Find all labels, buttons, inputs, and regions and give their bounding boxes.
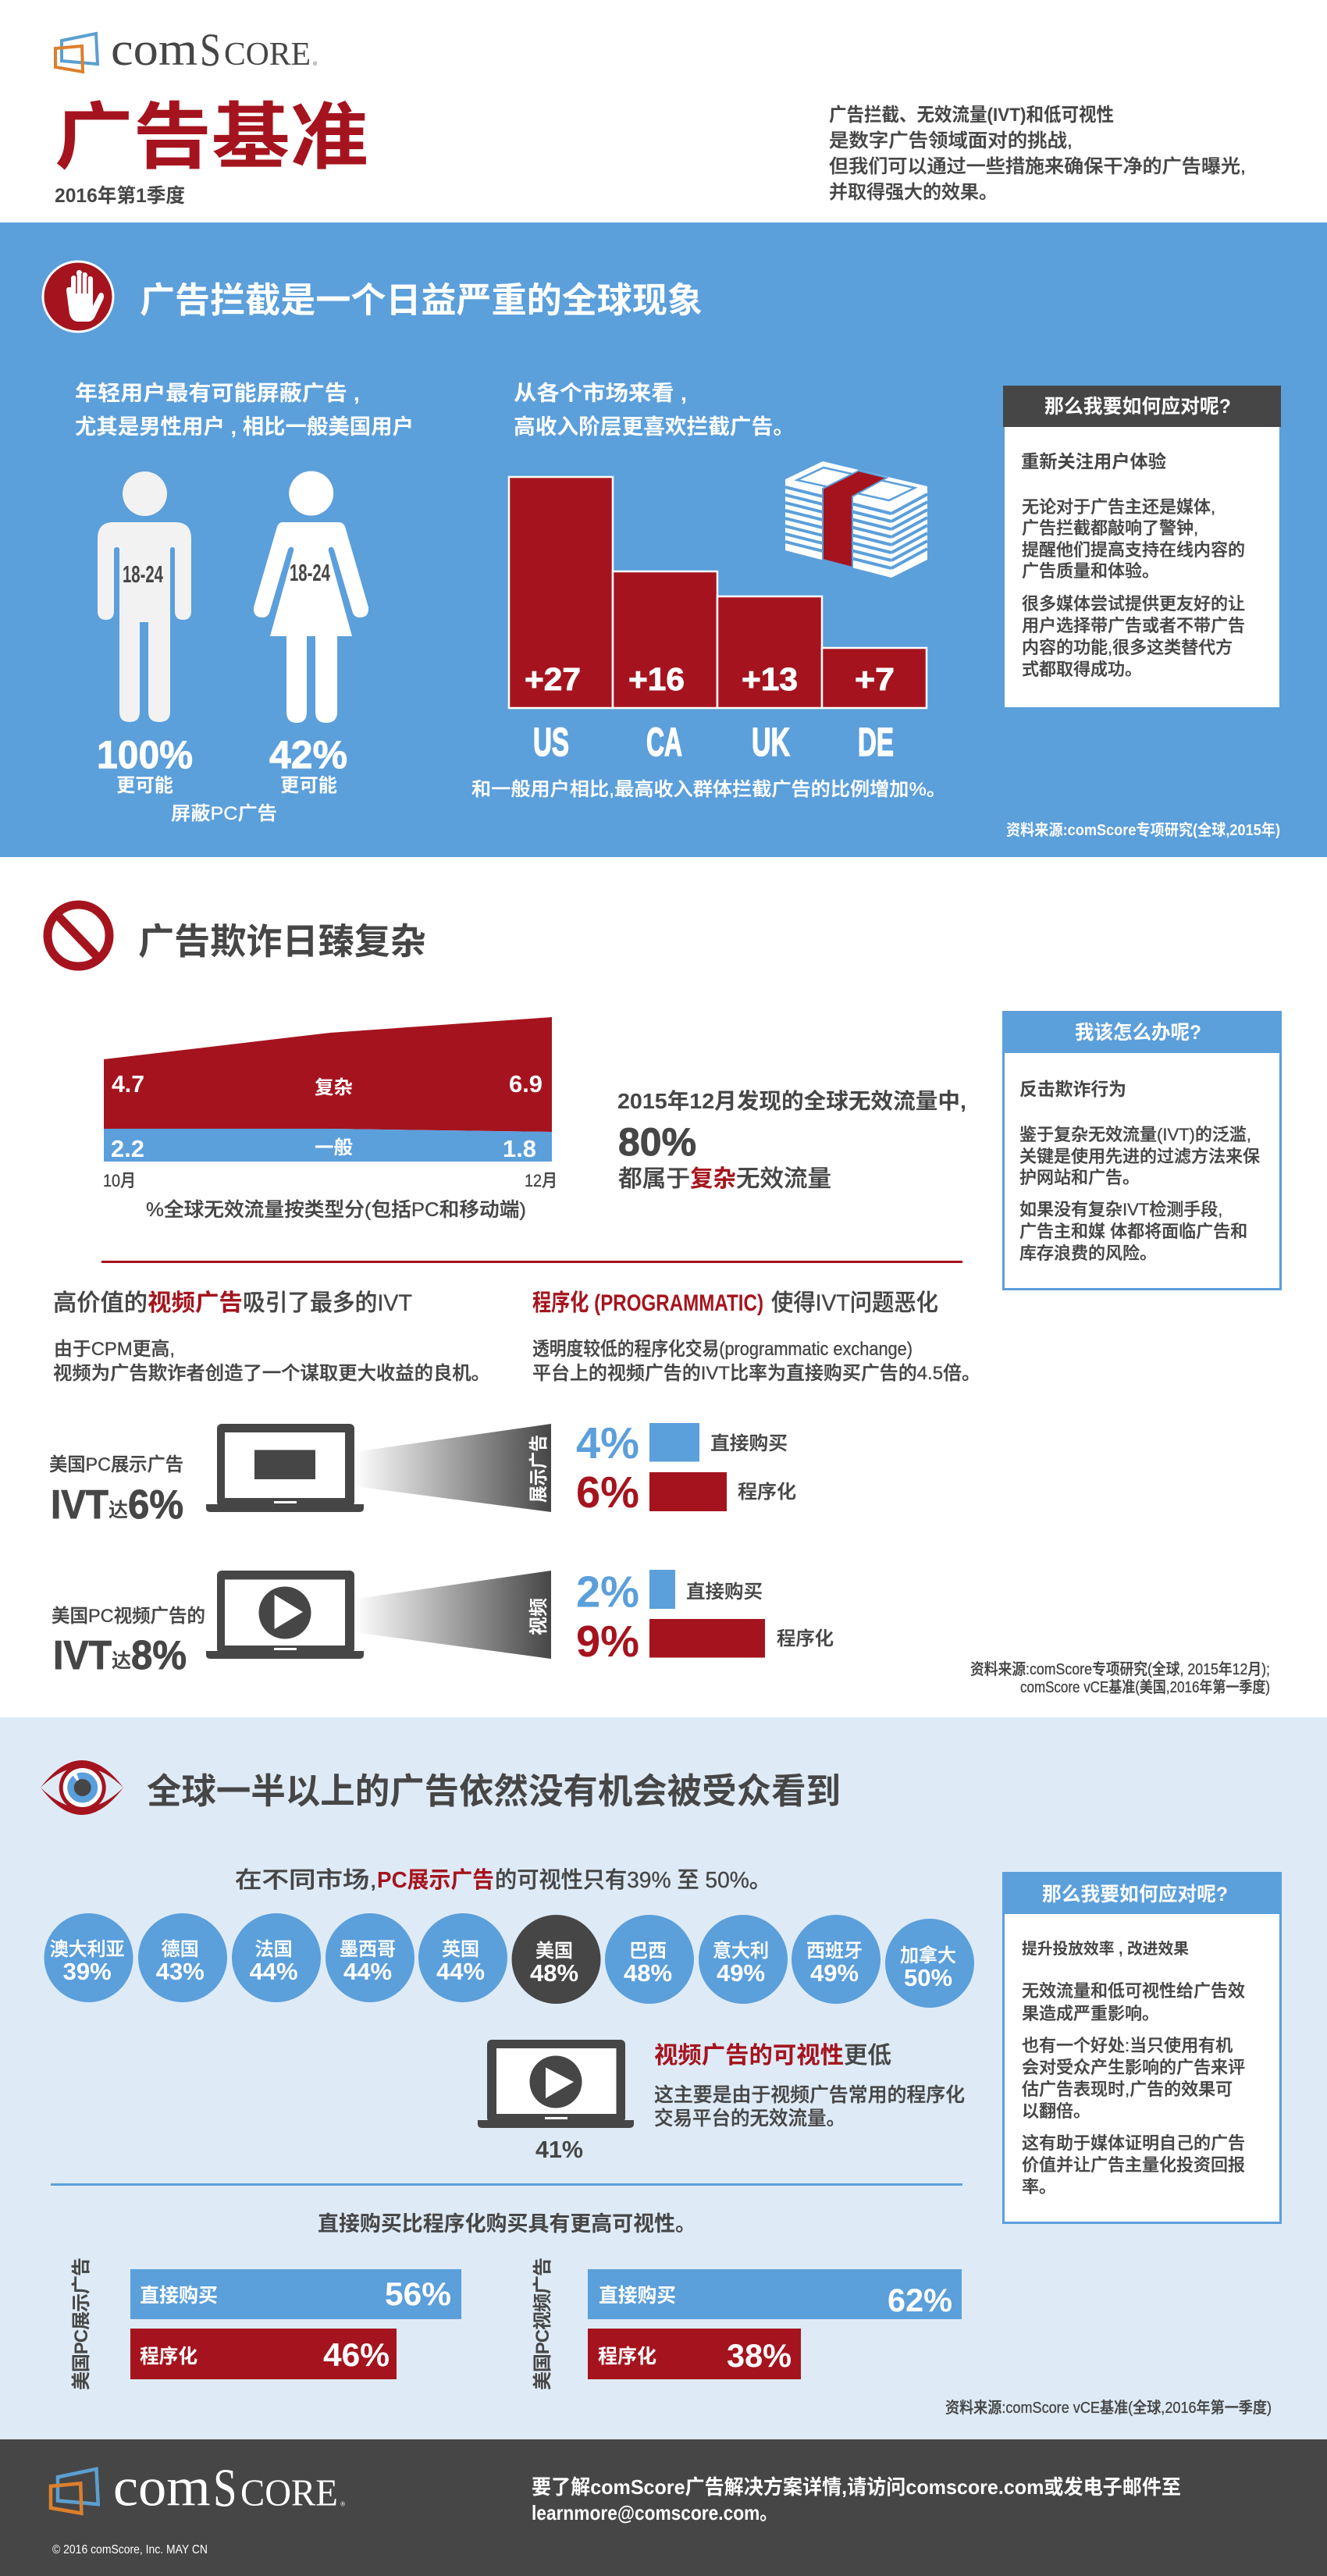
area chart: 10月 [103,1171,136,1190]
callout: 80%: 2015年12月发现的全球无效流量中, [617,1089,966,1113]
contact text: 要了解comScore广告解决方案详情,请访问comscore.com或发电子邮件至 [532,2475,1181,2499]
sidebar: what to do: 果造成严重影响。 [1022,2004,1159,2023]
callout: 80%: 80% [618,1120,696,1164]
subheading: markets: 从各个市场来看 , [514,382,687,405]
area chart [103,1017,557,1221]
bar chart: display: 美国PC展示广告 [71,2258,92,2390]
area chart: 1.8 [503,1135,536,1162]
panel: ad fraud [48,905,1282,1696]
intro text: 并取得强大的效果。 [829,182,998,203]
label: display IVT 6%: 达 [109,1500,128,1521]
chart: country circles: 法国 [255,1939,293,1960]
chart: country circles: 加拿大 [900,1944,956,1966]
area chart: %全球无效流量按类型分(包括PC和移动端) [146,1199,526,1221]
icon: woman: 18-24 [290,559,330,586]
sidebar: what to do: 那么我要如何应对呢? [1042,1883,1228,1905]
bar chart: video: 直接购买 [599,2285,676,2307]
text block: video ads: 由于CPM更高, [54,1339,175,1360]
source note: 资料来源:comScore专项研究(全球,2015年) [1006,820,1280,839]
bar chart: income by market: US [533,720,569,764]
chart: video bars: 直接购买 [686,1582,763,1603]
sidebar: what to do [1003,386,1281,707]
sidebar: what should I do [1002,1011,1282,1290]
source note: comScore vCE基准(美国,2016年第一季度) [1020,1678,1270,1696]
heading: 广告欺诈日臻复杂 [138,921,426,962]
chart: country circles: 意大利 [713,1941,769,1962]
source note: 资料来源:comScore vCE基准(全球,2016年第一季度) [945,2399,1272,2417]
text block: programmatic: 使得IVT问题恶化 [771,1290,938,1316]
chart: country circles: 49% [810,1959,859,1987]
label: display IVT 6%: IVT [51,1482,109,1528]
label: display IVT 6%: 美国PC展示广告 [49,1454,183,1475]
contact text [532,2475,1181,2524]
bar chart: income by market [509,477,927,764]
bar chart: income by market: +13 [742,661,798,697]
chart: country circles: 美国 [535,1941,573,1962]
chart: video bars: 2% [576,1567,639,1617]
sidebar: what should I do: 我该怎么办呢? [1075,1022,1201,1044]
sidebar: what should I do: 如果没有复杂IVT检测手段, [1019,1200,1222,1219]
sidebar: what to do: 很多媒体尝试提供更友好的让 [1022,594,1245,614]
icon: laptop with play [478,2040,634,2128]
chart: country circles: 39% [63,1958,112,1985]
logo: comScore: ® [313,61,318,67]
chart: country circles: 48% [624,1959,672,1987]
logo: comScore white: S [213,2458,237,2518]
sidebar: what to do: 估广告表现时,广告的效果可 [1022,2080,1233,2099]
logo: comScore white: com [113,2457,211,2517]
chart: video bars: 程序化 [777,1628,834,1649]
label: video IVT 8% [52,1606,205,1678]
icon: man [98,471,191,722]
arrow: display cone: 展示广告 [528,1435,550,1503]
subheading: markets: 高收入阶层更喜欢拦截广告。 [514,415,795,439]
heading: 广告拦截是一个日益严重的全球现象 [140,280,703,320]
subheading: 的可视性只有39% 至 50%。 [495,1867,771,1893]
text block: video viewability: 更低 [844,2043,891,2069]
stat: 100%: 100% [97,733,193,777]
icon: money stack [785,461,927,578]
sidebar: what should I do: 广告主和媒 体都将面临广告和 [1019,1222,1247,1241]
icon: man: 18-24 [123,560,163,588]
chart: country circles: 44% [250,1958,298,1985]
caption: income comparison: 和一般用户相比,最高收入群体拦截广告的比例增加%。 [471,779,946,800]
bar chart: income by market: CA [646,720,682,764]
callout: 80%: 无效流量 [736,1166,831,1192]
chart: country circles: 德国 [162,1939,199,1960]
sidebar: what to do: 重新关注用户体验 [1021,451,1166,471]
stat: 42%: 更可能 [280,775,337,796]
text block: programmatic: 程序化 (PROGRAMMATIC) [532,1290,763,1316]
sidebar: what to do: 率。 [1022,2177,1056,2197]
text block: video viewability: 视频广告的可视性 [654,2043,844,2069]
chart: country circles: 43% [156,1958,205,1985]
heading: direct vs programmatic: 直接购买比程序化购买具有更高可视性。 [318,2212,696,2236]
bar chart: video [532,2258,962,2390]
intro text: 广告拦截、无效流量(IVT)和低可视性 [829,105,1114,126]
source note: 资料来源:comScore专项研究(全球, 2015年12月); [970,1660,1270,1678]
stat: 41%: 41% [535,2136,583,2163]
label: video IVT 8%: 8% [131,1633,187,1678]
caption: block PC ads: 屏蔽PC广告 [171,803,277,824]
text block: programmatic: 平台上的视频广告的IVT比率为直接购买广告的4.5倍。 [532,1363,980,1384]
panel: viewability [0,1717,1327,2439]
sidebar: what to do: 提升投放效率 , 改进效果 [1022,1940,1189,1958]
sidebar: what to do: 用户选择带广告或者不带广告 [1022,616,1245,635]
logo: comScore: CORE [224,37,311,73]
header [55,23,1246,207]
chart: country circles: 巴西 [629,1941,667,1962]
sidebar: what to do: 以翻倍。 [1022,2101,1090,2121]
chart: country circles: 英国 [442,1939,479,1960]
sidebar: what to do: 广告质量和体验。 [1022,561,1159,581]
intro text [829,105,1246,203]
chart: country circles: 48% [530,1959,578,1987]
text block: video ads: 视频为广告欺诈者创造了一个谋取更大收益的良机。 [53,1363,490,1384]
subheading: young users: 年轻用户最有可能屏蔽广告 , [75,382,360,405]
bar chart: video: 62% [888,2282,952,2318]
chart: country circles: 44% [343,1958,392,1985]
icon: woman [254,471,368,723]
bar chart: income by market: +27 [525,661,581,697]
heading: 全球一半以上的广告依然没有机会被受众看到 [147,1771,841,1811]
logo: comScore white: ® [340,2500,345,2507]
bar chart: income by market: UK [752,720,790,764]
contact text: learnmore@comscore.com。 [532,2501,777,2524]
chart: country circles: 44% [436,1958,485,1985]
chart: video bars: 9% [576,1617,639,1667]
text block: video ads: 视频广告 [148,1290,243,1316]
chart: country circles: 50% [904,1964,952,1991]
label: video IVT 8%: 达 [112,1650,131,1672]
text block: video ads: 吸引了最多的IVT [243,1290,412,1316]
icon: prohibited [48,905,109,966]
arrow: video cone: 视频 [528,1598,550,1635]
bar chart: display: 56% [385,2275,451,2312]
intro text: 是数字广告领域面对的挑战, [829,130,1073,151]
copyright: © 2016 comScore, Inc. MAY CN [52,2543,208,2556]
chart: display bars: 直接购买 [710,1433,788,1454]
source note [970,1660,1270,1696]
label: video IVT 8%: 美国PC视频广告的 [52,1606,205,1627]
area chart: 6.9 [509,1070,543,1098]
date: 2016年第1季度 [55,185,185,207]
label: display IVT 6%: 6% [128,1482,183,1528]
area chart: 4.7 [112,1070,144,1098]
subheading: markets [514,382,795,439]
bar chart: income by market: DE [858,720,894,764]
bar chart: income by market: +16 [628,661,685,697]
bar chart: income by market: +7 [855,661,895,697]
chart: display bars: 4% [576,1418,639,1468]
panel: ad blocking [0,222,1327,857]
logo: comScore: com [111,23,197,75]
text block: video viewability: 这主要是由于视频广告常用的程序化 [654,2084,965,2106]
sidebar: what to do: 式都取得成功。 [1022,660,1142,679]
sidebar: what to do: 无论对于广告主还是媒体, [1022,497,1215,517]
arrow: display cone [354,1424,551,1512]
chart: video bars [576,1567,834,1667]
sidebar: what should I do: 关键是使用先进的过滤方法来保 [1019,1147,1260,1166]
sidebar: what to do: 广告拦截都敲响了警钟, [1022,518,1198,538]
chart: country circles: 西班牙 [806,1941,863,1962]
bar chart: video: 程序化 [598,2346,656,2368]
bar chart: display: 直接购买 [140,2285,218,2307]
title: 广告基准 [55,97,368,178]
sidebar: what to do: 内容的功能,很多这类替代方 [1022,638,1233,657]
subheading: young users [75,382,414,439]
bar chart: display: 46% [323,2336,390,2373]
text block: video viewability [654,2043,965,2129]
label: video IVT 8%: IVT [53,1633,112,1678]
sidebar: what to do: 价值并让广告主量化投资回报 [1022,2155,1245,2175]
stat: 100% [97,733,193,796]
chart: country circles: 49% [717,1959,765,1987]
area chart: 一般 [315,1137,353,1158]
text block: video ads [53,1290,490,1384]
icon: laptop with banner [206,1424,364,1512]
logo: comScore white: CORE [240,2472,338,2514]
sidebar: what to do: 会对受众产生影响的广告来评 [1022,2058,1245,2077]
sidebar: what should I do: 护网站和广告。 [1019,1168,1140,1187]
sidebar: what should I do: 鉴于复杂无效流量(IVT)的泛滥, [1019,1125,1251,1144]
subheading: 在不同市场, [235,1867,377,1893]
stat: 42% [269,733,347,796]
icon: eye [41,1760,123,1815]
sidebar: what to do: 那么我要如何应对呢? [1044,395,1231,418]
subheading: PC展示广告 [377,1867,494,1893]
logo: comScore [55,23,318,76]
sidebar: what should I do: 反击欺诈行为 [1019,1079,1126,1099]
text block: programmatic: 透明度较低的程序化交易(programmatic exchange) [532,1339,913,1360]
icon: laptop with play [206,1571,364,1659]
sidebar: what to do: 也有一个好处:当只使用有机 [1022,2036,1233,2055]
chart: display bars: 6% [576,1468,639,1517]
sidebar: what to do [1002,1872,1282,2223]
callout: 80% [617,1089,966,1192]
arrow: video cone [354,1571,551,1659]
text block: video viewability: 交易平台的无效流量。 [654,2108,845,2129]
stat: 100%: 更可能 [116,775,173,796]
logo: comScore white [51,2457,345,2518]
chart: display bars [576,1418,796,1517]
chart: country circles: 澳大利亚 [50,1939,125,1960]
logo: comScore: S [200,24,221,76]
bar chart: video: 美国PC视频广告 [532,2258,553,2390]
label: display IVT 6% [49,1454,183,1528]
callout: 80%: 复杂 [690,1166,736,1192]
callout: 80%: 都属于 [618,1166,690,1192]
subheading [235,1867,771,1893]
sidebar: what to do: 这有助于媒体证明自己的广告 [1022,2133,1245,2153]
stat: 42%: 42% [269,733,347,777]
chart: display bars: 程序化 [738,1482,796,1503]
area chart: 12月 [525,1171,557,1190]
bar chart: display: 程序化 [140,2346,197,2368]
text block: programmatic [532,1290,980,1384]
bar chart: display [71,2258,461,2390]
sidebar: what should I do: 库存浪费的风险。 [1019,1244,1157,1263]
footer [0,2439,1327,2576]
chart: country circles [44,1913,974,2008]
subheading: young users: 尤其是男性用户 , 相比一般美国用户 [75,415,414,439]
text block: video ads: 高价值的 [53,1290,148,1316]
icon: stop hand [42,261,114,333]
intro text: 但我们可以通过一些措施来确保干净的广告曝光, [829,156,1246,177]
sidebar: what to do: 提醒他们提高支持在线内容的 [1022,540,1245,560]
sidebar: what to do: 无效流量和低可视性给广告效 [1022,1981,1245,2001]
area chart: 2.2 [111,1135,144,1162]
area chart: 复杂 [315,1077,353,1098]
chart: country circles: 墨西哥 [340,1939,396,1960]
bar chart: video: 38% [727,2337,792,2374]
